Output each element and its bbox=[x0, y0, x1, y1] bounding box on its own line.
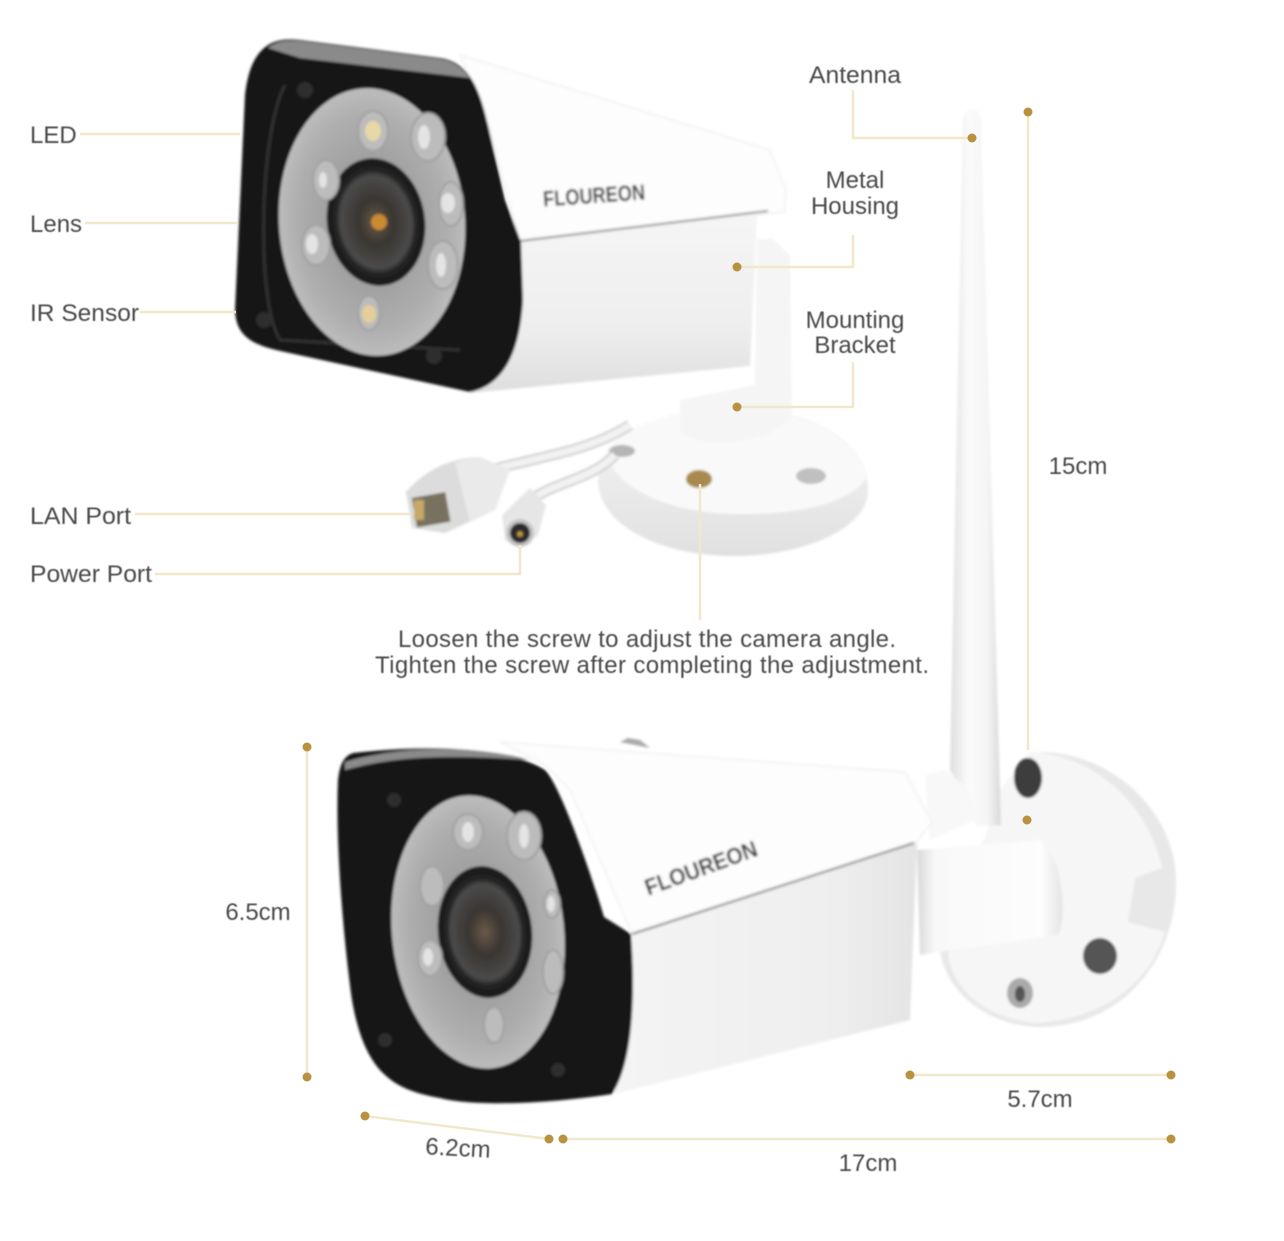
brand top: FLOUREON bbox=[542, 179, 646, 212]
housing bbox=[500, 738, 932, 1094]
front bezel bbox=[337, 749, 633, 1103]
dimension: 6.5cm: 6.5cm bbox=[225, 899, 291, 926]
LEDs bbox=[418, 812, 563, 1043]
label: IR Sensor: IR Sensor bbox=[30, 300, 139, 327]
labels bbox=[30, 62, 1107, 1177]
front bezel bbox=[235, 39, 523, 392]
label: Antenna: Antenna bbox=[809, 62, 902, 89]
label: LED: LED bbox=[30, 122, 77, 149]
lens bbox=[431, 861, 539, 1003]
label: LAN Port: LAN Port bbox=[30, 503, 131, 530]
top camera bbox=[235, 39, 868, 556]
dimension: 17cm: 17cm bbox=[839, 1150, 897, 1177]
mounting bracket arm bbox=[680, 238, 792, 442]
label: Metal Housing: Metal bbox=[826, 167, 884, 194]
label: Power Port: Power Port bbox=[30, 561, 152, 588]
label: Lens: Lens bbox=[30, 211, 82, 238]
label: Mounting Bracket: Bracket bbox=[814, 332, 896, 359]
LAN connector bbox=[406, 457, 510, 533]
cables bbox=[490, 425, 630, 500]
bottom camera bbox=[337, 109, 1176, 1103]
arm bbox=[917, 840, 1063, 955]
brand bottom: FLOUREON bbox=[641, 836, 761, 900]
lens bbox=[319, 152, 433, 292]
dimension: 5.7cm: 5.7cm bbox=[1007, 1086, 1073, 1113]
power connector bbox=[502, 488, 546, 548]
label: Metal Housing: Housing bbox=[811, 193, 899, 220]
note: adjust screw line two: Tighten the screw after completing the adjustment. bbox=[375, 652, 929, 679]
marker dots bbox=[302, 108, 1176, 1144]
LEDs bbox=[302, 111, 463, 330]
note: adjust screw line one: Loosen the screw to adjust the camera angle. bbox=[398, 626, 896, 653]
wall mount bbox=[940, 752, 1176, 1027]
antenna base bbox=[925, 770, 975, 840]
dimension: 15cm: 15cm bbox=[1049, 453, 1107, 480]
mounting base bbox=[598, 408, 868, 556]
dimension: 6.2cm: 6.2cm bbox=[425, 1133, 491, 1164]
label: Mounting Bracket: Mounting bbox=[806, 307, 904, 334]
antenna bbox=[950, 109, 1001, 826]
housing bbox=[460, 55, 786, 393]
leader lines bbox=[80, 90, 1171, 1139]
